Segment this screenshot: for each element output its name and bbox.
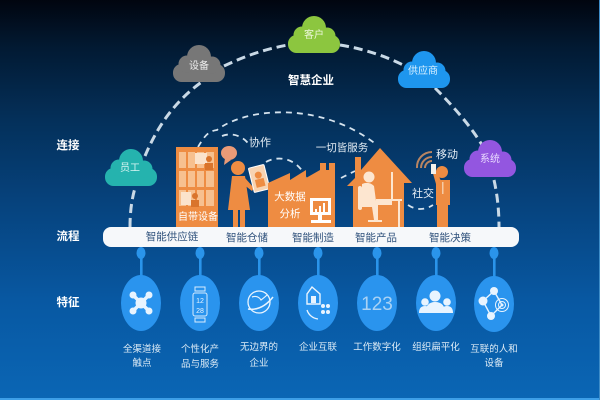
cloud: 客户: 客户	[304, 28, 324, 41]
icon: factory: 分析	[280, 207, 301, 220]
feature: 无边界的企业: 无边界的	[240, 341, 278, 353]
row label: 特征: 特征	[56, 295, 80, 309]
icon: factory	[268, 163, 335, 227]
cloud: 员工: 员工	[120, 162, 140, 174]
feature: 工作数字化: 工作数字化	[353, 341, 401, 353]
cloud: 员工	[105, 149, 157, 186]
bar labels: 智能制造	[292, 231, 334, 244]
large dashed arc	[130, 45, 499, 227]
bar labels: 智能供应链	[146, 230, 199, 243]
feature: 工作数字化: 123	[361, 294, 393, 315]
cloud: 系统	[464, 140, 516, 177]
label: 移动: 移动	[436, 148, 458, 161]
feature: 个性化产品与服务: 12	[196, 298, 204, 305]
feature: 个性化产品与服务: 品与服务	[181, 358, 219, 370]
icon: man with phone	[431, 164, 450, 227]
cloud: 供应商	[398, 51, 450, 88]
label: 协作: 协作	[249, 135, 271, 149]
feature: 无边界的企业	[239, 247, 279, 369]
bar labels: 智能决策	[429, 231, 471, 244]
feature: 企业互联	[298, 247, 338, 353]
cloud: 客户	[288, 16, 340, 53]
feature: 企业互联: 企业互联	[299, 341, 337, 353]
icon: wifi signal	[417, 152, 432, 168]
feature: 个性化产品与服务: 28	[196, 308, 204, 315]
process bar	[103, 227, 519, 247]
feature: 互联的人和设备: 设备	[484, 357, 504, 369]
inner dashed arc	[198, 112, 433, 209]
cloud: 设备: 设备	[189, 59, 209, 72]
label: 社交: 社交	[412, 186, 434, 200]
bar labels: 智能产品	[355, 231, 397, 244]
icon: office building	[176, 147, 218, 227]
feature: 全渠道接触点: 触点	[132, 357, 152, 369]
row label: 流程: 流程	[56, 229, 80, 243]
bar labels: 智能仓储	[226, 231, 268, 244]
feature: 个性化产品与服务	[180, 247, 220, 370]
feature: 个性化产品与服务: 个性化产	[181, 343, 219, 355]
bar labels	[146, 230, 471, 244]
factory caption: 大数据	[274, 190, 306, 203]
title: 智慧企业	[288, 73, 334, 87]
icon: woman with tablet	[221, 146, 270, 227]
feature: 无边界的企业: 企业	[249, 357, 269, 369]
feature: 互联的人和设备	[470, 247, 518, 369]
building caption: 自带设备	[178, 210, 218, 223]
cloud: 设备	[173, 45, 225, 82]
feature: 全渠道接触点	[121, 247, 161, 369]
label: 一切皆服务: 一切皆服务	[316, 141, 369, 154]
feature: 互联的人和设备: 互联的人和	[470, 343, 518, 355]
feature: 组织扁平化: 组织扁平化	[412, 341, 460, 353]
row label: 连接: 连接	[56, 138, 80, 152]
cloud: 系统: 系统	[480, 152, 500, 165]
feature: 组织扁平化	[412, 247, 460, 353]
icon: house with person at desk	[347, 148, 412, 227]
feature: 工作数字化	[353, 247, 401, 353]
cloud: 供应商: 供应商	[408, 64, 438, 77]
feature: 全渠道接触点: 全渠道接	[123, 343, 161, 355]
